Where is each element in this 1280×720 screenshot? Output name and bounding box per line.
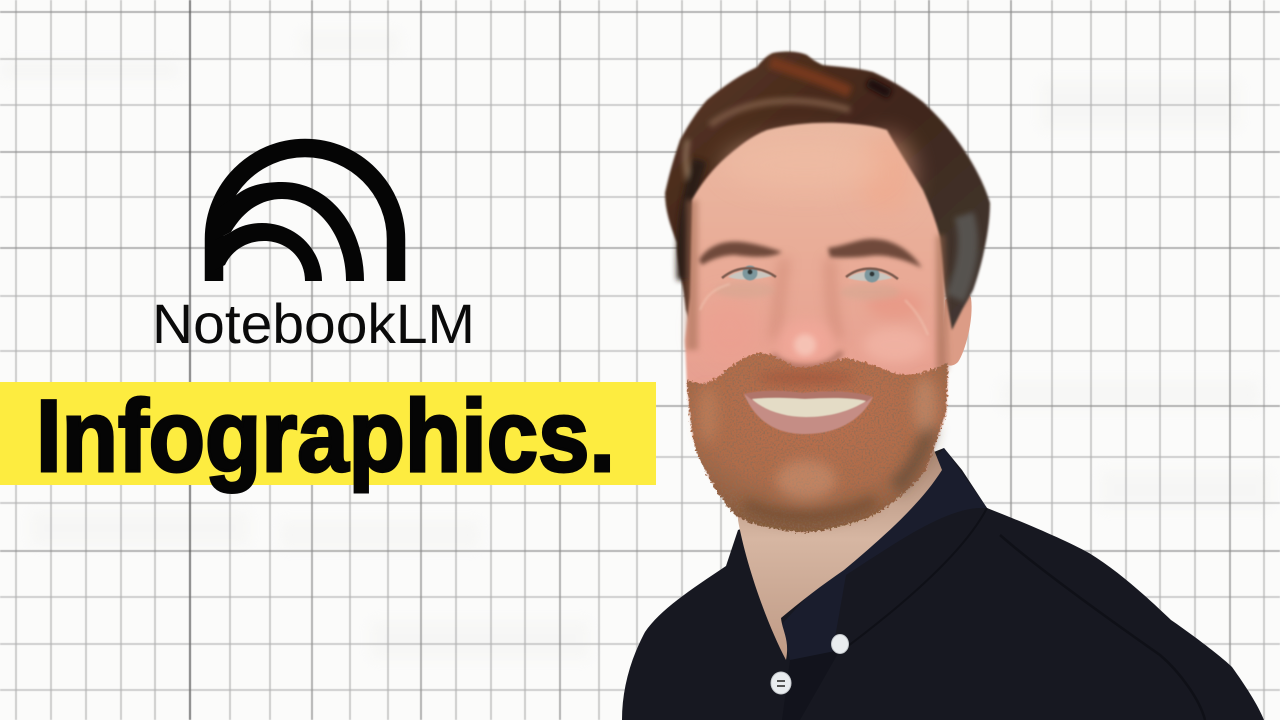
face shading [686, 135, 948, 370]
icon: nested arcs [214, 148, 396, 281]
portrait of presenter [622, 52, 1264, 720]
NotebookLM logo [152, 148, 475, 355]
yellow title banner [0, 379, 656, 493]
title: Infographics. [36, 379, 615, 493]
beard [687, 353, 948, 532]
smile [744, 391, 873, 434]
beard shading [698, 371, 937, 517]
shirt [622, 448, 1264, 720]
nose [772, 320, 842, 367]
hair [665, 52, 990, 340]
eyebrows [699, 239, 922, 268]
logo wordmark: NotebookLM [152, 292, 475, 355]
neck [738, 440, 942, 660]
eyes [722, 266, 898, 282]
wrinkles [700, 284, 928, 335]
right ear [942, 292, 972, 366]
hair highlights [684, 62, 968, 298]
shirt buttons [771, 634, 848, 694]
face [685, 123, 948, 532]
